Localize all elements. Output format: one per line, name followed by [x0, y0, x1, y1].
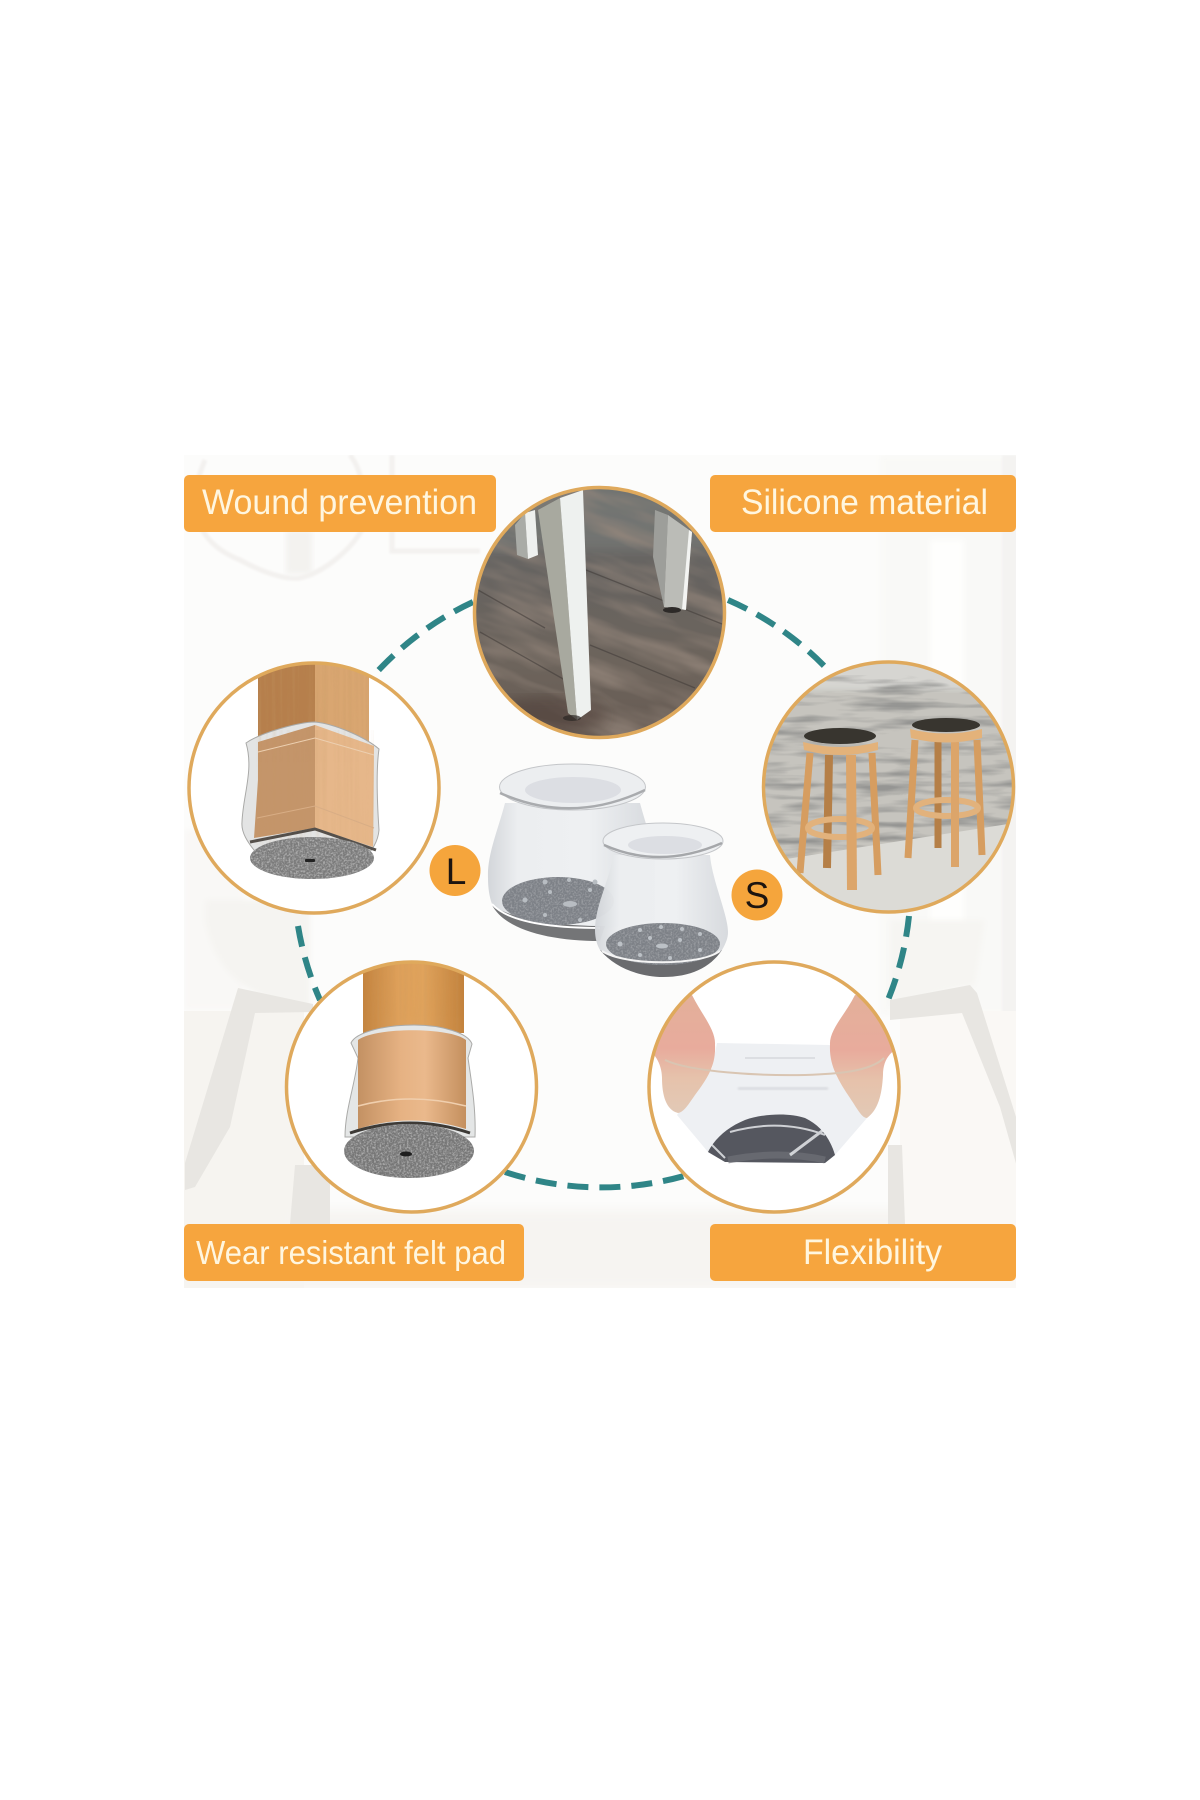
label: Silicone material	[710, 475, 1016, 532]
photo circle: wound prevention, table legs on wood floor	[472, 486, 726, 740]
size badge: L: L	[446, 851, 466, 892]
large cover base and pad	[492, 905, 605, 941]
floor	[788, 824, 1006, 910]
black rim at base	[250, 829, 376, 850]
highlights	[712, 1124, 826, 1159]
small cover rim	[603, 823, 723, 859]
product: small leg cover	[595, 823, 728, 977]
stretched rim	[665, 1058, 884, 1075]
right stool	[908, 718, 982, 867]
size badge: L	[430, 845, 480, 896]
size badge: S: S	[745, 875, 769, 916]
label: Wear resistant felt pad	[184, 1224, 524, 1281]
large cover rim	[500, 764, 646, 810]
wooden post	[258, 664, 315, 736]
faded chair legs	[185, 985, 1017, 1224]
label: Wear resistant felt pad: Wear resistant felt pad	[196, 1234, 506, 1271]
felt pad	[250, 837, 374, 879]
photo circle: flexibility, fingers stretching cover	[640, 962, 905, 1212]
label: Wound prevention	[184, 475, 496, 532]
felt pad seen through cover	[708, 1114, 835, 1163]
panel: faded room background	[184, 455, 1020, 1290]
label: Wound prevention: Wound prevention	[202, 483, 477, 522]
dashed connecting ring	[298, 600, 909, 1187]
fingers	[654, 995, 716, 1113]
label: Flexibility: Flexibility	[803, 1233, 942, 1272]
clear cover body	[242, 722, 379, 858]
clear cover	[345, 1025, 475, 1137]
faded floor	[184, 1011, 304, 1290]
photo circle: silicone material, bar stools	[760, 660, 1020, 915]
felt pad	[344, 1124, 474, 1178]
left stool	[800, 728, 878, 890]
back left leg	[515, 513, 528, 559]
round wooden post	[363, 958, 464, 1033]
label: Flexibility	[710, 1224, 1016, 1281]
front leg	[538, 498, 577, 720]
size badge: S	[732, 870, 782, 920]
photo circle: square wooden leg in cover	[189, 660, 439, 913]
back right leg	[653, 510, 668, 607]
floor planks	[476, 490, 723, 736]
photo circle: wear resistant felt pad on round leg	[286, 958, 536, 1212]
faded chair seat	[246, 902, 308, 1002]
stretched clear cover	[677, 1043, 867, 1163]
label: Silicone material: Silicone material	[741, 483, 988, 522]
faded window strips	[880, 455, 1017, 1015]
stone wall	[760, 675, 1020, 865]
faded mirror on wall	[195, 455, 480, 578]
product: large leg cover	[488, 764, 655, 941]
